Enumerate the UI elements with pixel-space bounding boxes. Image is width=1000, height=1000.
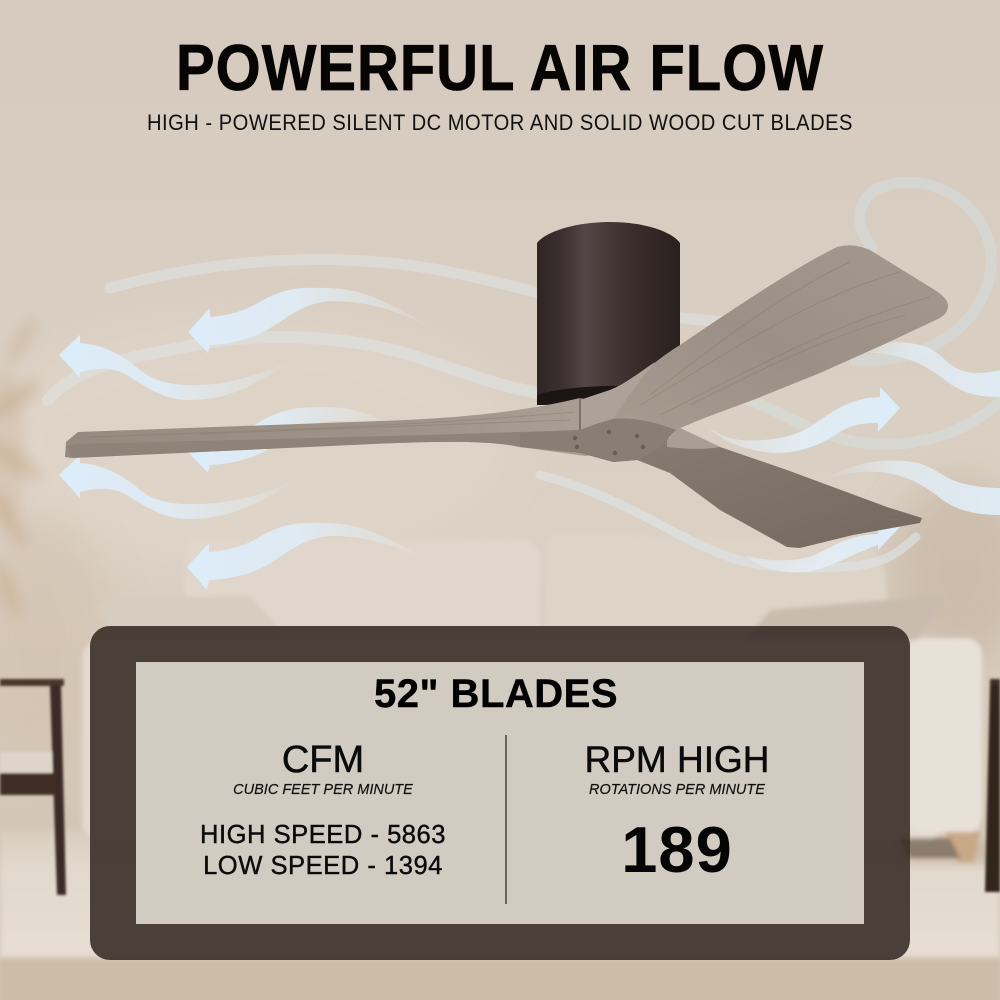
air flow arrow: right upper [707, 387, 900, 453]
floor [0, 830, 1000, 1000]
air flow arrow: far left upper [59, 335, 293, 400]
heading: RPM high: RPM HIGH [584, 739, 770, 780]
fan blade: lower right [580, 425, 922, 548]
air flow arrow: lower left [187, 523, 430, 590]
right chair [985, 679, 1000, 892]
blade wood grain [90, 262, 930, 520]
panel: specifications frame [90, 626, 910, 960]
panel: specifications card [136, 662, 864, 924]
pampas grass plant [0, 313, 46, 621]
air flow streak: right upper [850, 342, 1000, 397]
column: RPM [584, 739, 770, 886]
air flow arrow: upper left [188, 288, 430, 353]
caption: cubic feet per minute: CUBIC FEET PER MINUTE [233, 782, 413, 798]
value: RPM: 189 [621, 813, 733, 886]
air flow arrow: right lower [745, 527, 900, 572]
column: CFM [200, 739, 446, 880]
fan hub with screws [520, 398, 676, 462]
left chair [0, 679, 66, 895]
fan motor housing [537, 222, 680, 405]
title: POWERFUL AIR FLOW [176, 31, 824, 104]
wall shading [0, 320, 1000, 760]
ceiling fan [65, 222, 948, 548]
heading: blade size: 52" BLADES [374, 672, 618, 716]
heading: CFM: CFM [282, 739, 364, 781]
sofa [82, 534, 982, 862]
air flow swirls, back [48, 182, 1000, 568]
air flow arrow: mid left [188, 407, 392, 473]
air flow arrow: far left lower [59, 455, 298, 519]
value: low speed: LOW SPEED - 1394 [203, 852, 443, 880]
fan blade: right [580, 245, 948, 442]
caption: rotations per minute: ROTATIONS PER MINUTE [589, 782, 765, 798]
subtitle: HIGH - POWERED SILENT DC MOTOR AND SOLID WOOD CUT BLADES [147, 110, 853, 135]
divider [505, 735, 506, 904]
value: high speed: HIGH SPEED - 5863 [200, 821, 446, 849]
air flow streak: right lower [830, 461, 1000, 515]
fan blade: left [65, 398, 640, 458]
